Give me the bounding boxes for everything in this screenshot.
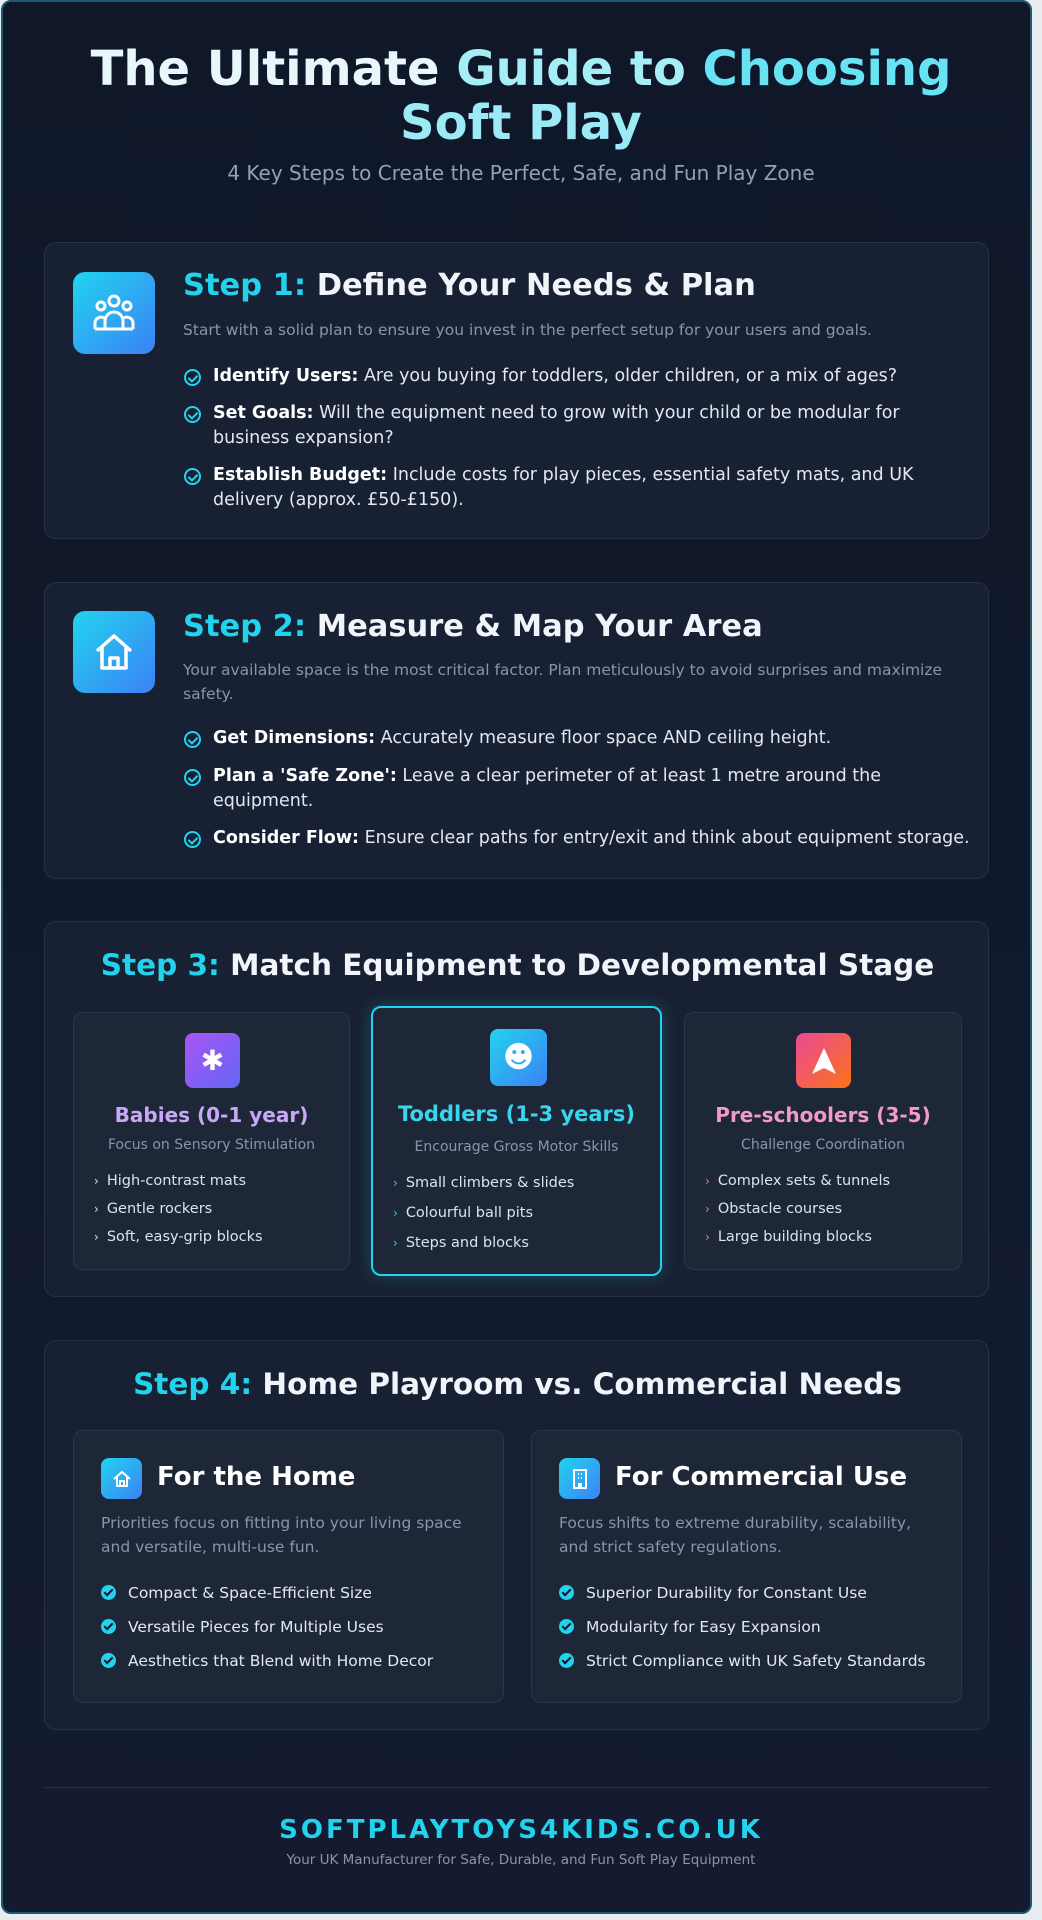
card: commercial: Modularity for Easy Expansion (586, 1618, 821, 1636)
text: Set Goals: Will the equipment need to grow with your child or be modular for business expansion? (213, 403, 900, 448)
card: pre-schoolers: Challenge Coordination (741, 1137, 905, 1153)
card: pre-schoolers: Pre-schoolers (3-5) (715, 1103, 931, 1127)
icon: puzzle (185, 1033, 240, 1088)
card: babies: Focus on Sensory Stimulation (108, 1137, 315, 1153)
card: babies: › Gentle rockers (94, 1201, 212, 1217)
heading: Step 2: Measure & Map Your Area (183, 609, 763, 644)
text: Identify Users: Are you buying for toddlers, older children, or a mix of ages? (213, 366, 897, 386)
card: home: Compact & Space-Efficient Size (128, 1584, 372, 1602)
card: commercial (531, 1430, 962, 1703)
bullets step1 (184, 366, 914, 510)
footer tagline: Your UK Manufacturer for Safe, Durable, and Fun Soft Play Equipment (287, 1852, 755, 1868)
card: commercial: Strict Compliance with UK Safety Standards (586, 1652, 926, 1670)
card: home: Versatile Pieces for Multiple Uses (128, 1618, 384, 1636)
title: Soft Play (400, 95, 642, 151)
icon: climb (796, 1033, 851, 1088)
icon: smiley (490, 1029, 547, 1086)
bullets step2 (184, 728, 970, 848)
card: babies: › High-contrast mats (94, 1173, 246, 1189)
text: Consider Flow: Ensure clear paths for entry/exit and think about equipment storage. (213, 828, 970, 848)
card: toddlers: › Small climbers & slides (393, 1175, 574, 1191)
icon: users (73, 272, 155, 354)
text: Plan a 'Safe Zone': Leave a clear perimeter of at least 1 metre around the equipment. (213, 766, 881, 811)
card: pre-schoolers: › Complex sets & tunnels (705, 1173, 890, 1189)
card: home: Aesthetics that Blend with Home Decor (128, 1652, 433, 1670)
card: pre-schoolers (684, 1012, 962, 1270)
panel: step 1 (44, 242, 989, 539)
card: toddlers: › Steps and blocks (393, 1235, 529, 1251)
card: toddlers: Toddlers (1-3 years) (398, 1102, 635, 1126)
card: commercial: Superior Durability for Constant Use (586, 1584, 867, 1602)
panel: step 4 (44, 1340, 989, 1730)
icon: smiley: ☻ (503, 1040, 534, 1075)
card: commercial: Focus shifts to extreme durability, scalability, and strict safety regulations. (559, 1514, 911, 1556)
card: home: Priorities focus on fitting into your living space and versatile, multi-use fun. (101, 1514, 462, 1556)
panel: step 3 (44, 921, 989, 1297)
icon: building (559, 1458, 600, 1499)
footer brand: SOFTPLAYTOYS4KIDS.CO.UK (279, 1815, 763, 1845)
description: Start with a solid plan to ensure you invest in the perfect setup for your users and goals. (183, 321, 872, 339)
heading: Step 4: Home Playroom vs. Commercial Needs (133, 1367, 902, 1401)
card: home: For the Home (157, 1462, 355, 1492)
card: toddlers: › Colourful ball pits (393, 1205, 533, 1221)
text: Establish Budget: Include costs for play pieces, essential safety mats, and UK delivery (approx. £50-£150). (213, 465, 913, 510)
card: toddlers (371, 1006, 662, 1276)
icon: house (73, 611, 155, 693)
icon: puzzle: ✱ (201, 1044, 224, 1077)
heading: Step 3: Match Equipment to Developmental Stage (101, 948, 934, 982)
card: pre-schoolers: › Obstacle courses (705, 1201, 842, 1217)
title (90, 41, 951, 151)
card: home (73, 1430, 504, 1703)
text: Get Dimensions: Accurately measure floor space AND ceiling height. (213, 728, 831, 748)
card: toddlers: Encourage Gross Motor Skills (415, 1139, 618, 1155)
icon: home (101, 1458, 142, 1499)
description: Your available space is the most critical factor. Plan meticulously to avoid surprises and maximize safety. (183, 661, 942, 703)
card: pre-schoolers: › Large building blocks (705, 1229, 872, 1245)
card: babies: Babies (0-1 year) (115, 1103, 308, 1127)
subtitle: 4 Key Steps to Create the Perfect, Safe, and Fun Play Zone (227, 161, 815, 185)
card: commercial: For Commercial Use (615, 1462, 907, 1492)
title: The Ultimate Guide to Choosing (91, 41, 951, 97)
card: babies: › Soft, easy-grip blocks (94, 1229, 263, 1245)
heading: Step 1: Define Your Needs & Plan (183, 268, 756, 303)
panel: step 2 (44, 582, 989, 879)
card: babies (73, 1012, 350, 1270)
